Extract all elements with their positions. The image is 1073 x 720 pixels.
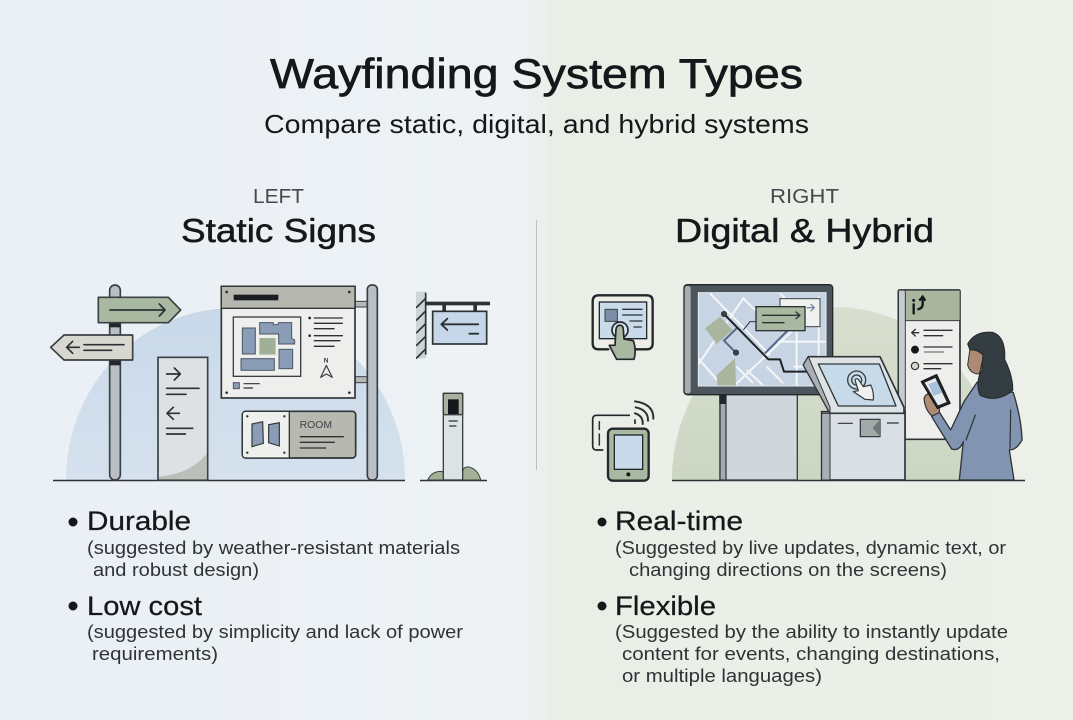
right arrow sign bbox=[98, 297, 181, 323]
right bullet list bbox=[598, 506, 1008, 686]
subtitle: Compare static, digital, and hybrid systems bbox=[264, 109, 809, 139]
bullet: flexible: or multiple languages) bbox=[622, 666, 822, 686]
bullet: real-time: Real-time bbox=[615, 506, 743, 536]
tall directory sign bbox=[158, 357, 208, 480]
left column label: LEFT bbox=[253, 186, 304, 208]
digital totem sign bbox=[898, 290, 960, 439]
right column label: RIGHT bbox=[770, 186, 839, 208]
bullet: flexible: Flexible bbox=[615, 591, 716, 621]
fingerpost and tall sign group bbox=[51, 285, 208, 480]
bullet: low cost: requirements) bbox=[92, 644, 218, 664]
map board and room sign group bbox=[221, 285, 490, 480]
right column heading: Digital & Hybrid bbox=[675, 212, 934, 249]
ground line left bbox=[53, 480, 405, 482]
coat and arm bbox=[932, 382, 1022, 480]
touch panel icon bbox=[593, 295, 653, 359]
ground line small bbox=[420, 480, 487, 482]
bullet: low cost: (suggested by simplicity and lack of power bbox=[87, 622, 463, 642]
display stand bbox=[719, 394, 797, 480]
ground line right bbox=[672, 480, 1025, 482]
bullet: low cost bbox=[68, 591, 463, 664]
bullet: flexible bbox=[598, 591, 1008, 686]
interactive kiosk bbox=[803, 357, 905, 480]
map routes bbox=[724, 328, 787, 353]
room sign bbox=[242, 411, 356, 458]
hand bbox=[924, 394, 939, 416]
hanging blade sign bbox=[416, 292, 490, 358]
left arrow sign bbox=[51, 335, 133, 360]
bullet: real-time: changing directions on the screens) bbox=[629, 560, 947, 580]
title: Wayfinding System Types bbox=[270, 50, 803, 97]
bullet: durable bbox=[68, 506, 460, 580]
site map board bbox=[221, 286, 355, 398]
illustration: digital backdrop arc bbox=[672, 307, 998, 480]
map roads bbox=[697, 293, 826, 387]
bollard marker bbox=[443, 393, 463, 480]
bullet: real-time: (Suggested by live updates, dynamic text, or bbox=[615, 538, 1006, 558]
shrub bbox=[428, 467, 481, 480]
bullet: low cost: Low cost bbox=[87, 591, 203, 621]
hair bbox=[968, 332, 1013, 398]
bullet: flexible: (Suggested by the ability to instantly update bbox=[615, 622, 1008, 642]
illustration: static signs backdrop arc bbox=[66, 308, 405, 480]
sign post bbox=[110, 285, 120, 480]
bullet: durable: (suggested by weather-resistant materials bbox=[87, 538, 460, 558]
connected tablet icon bbox=[593, 401, 653, 481]
center divider bbox=[536, 220, 538, 470]
site map board: N bbox=[324, 358, 329, 365]
face bbox=[968, 349, 984, 374]
coat crease bbox=[966, 410, 1011, 448]
map parks bbox=[705, 317, 736, 386]
support pole bbox=[355, 285, 377, 480]
bullet: durable: Durable bbox=[87, 506, 191, 536]
phone bbox=[921, 375, 950, 408]
room sign: ROOM bbox=[300, 420, 332, 431]
digital side right group bbox=[803, 290, 1022, 480]
digital side left group bbox=[593, 285, 833, 481]
left bullet list bbox=[68, 506, 463, 664]
bullet: durable: and robust design) bbox=[93, 560, 259, 580]
large digital map display bbox=[684, 285, 833, 395]
person with phone bbox=[921, 332, 1022, 480]
bullet: real-time bbox=[598, 506, 1006, 580]
left column heading: Static Signs bbox=[181, 212, 376, 249]
bullet: flexible: content for events, changing destinations, bbox=[622, 644, 1000, 664]
map callouts bbox=[780, 299, 820, 327]
